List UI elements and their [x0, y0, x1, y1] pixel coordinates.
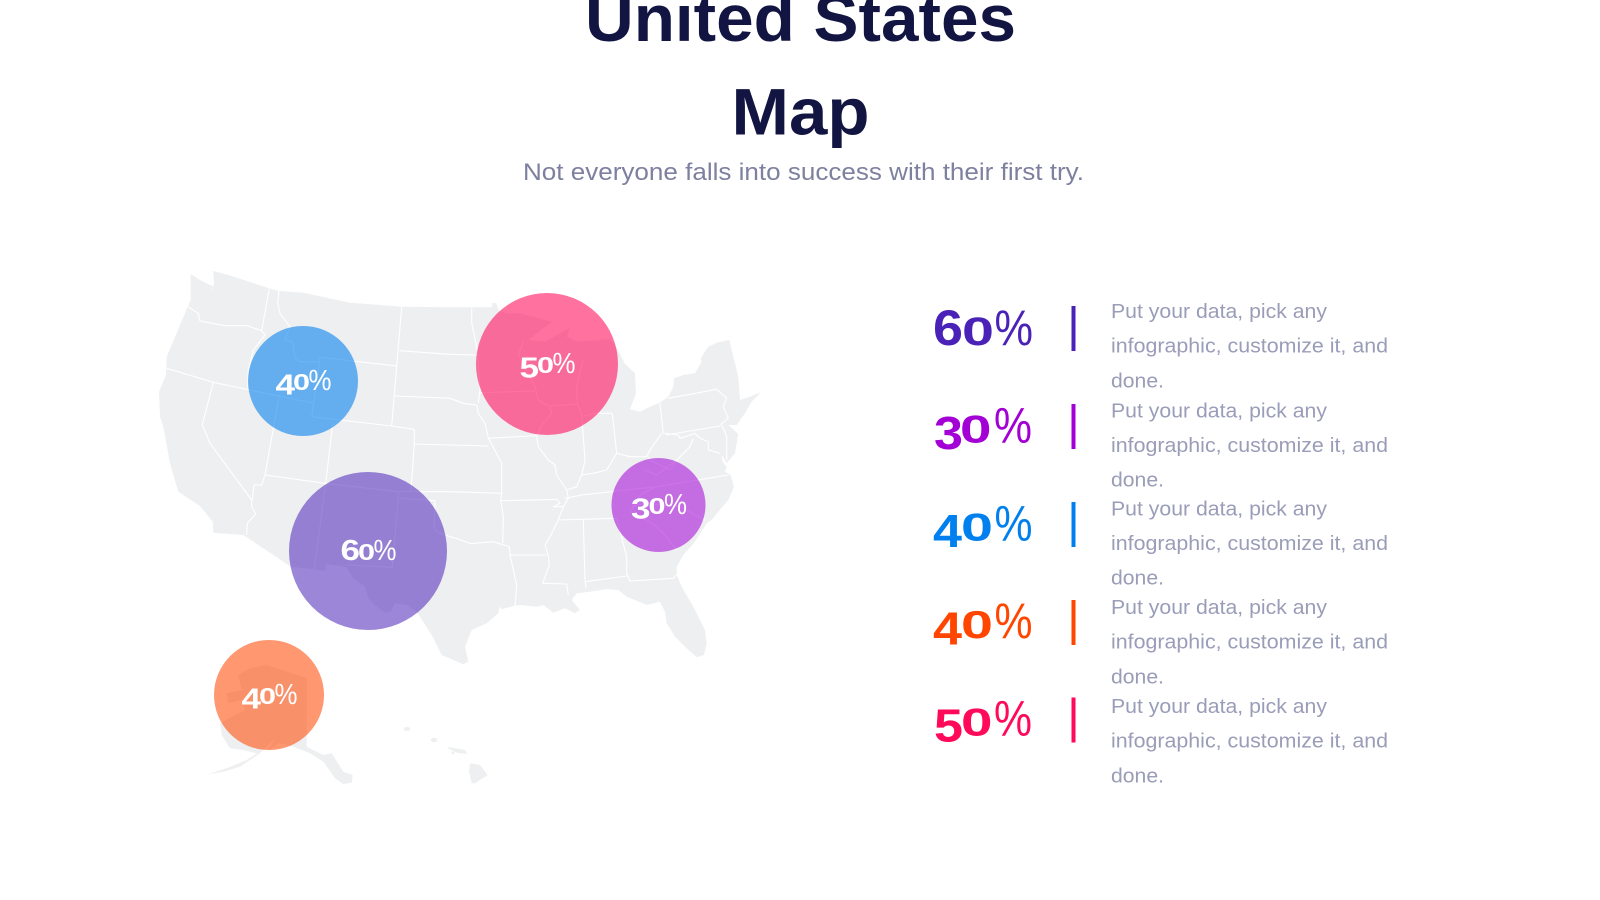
bubble: 60% south-west: 0: [358, 539, 375, 565]
description: infographic, customize it, and: [1111, 335, 1388, 358]
bubble: 30% south-east: [612, 458, 706, 552]
bubble: 40% Alaska: 4: [242, 683, 261, 715]
bubble: 40% Alaska: [214, 640, 324, 750]
legend row: 30%: [934, 398, 1388, 492]
value: 3: [934, 407, 963, 459]
bubble: 40% north-west: 0: [293, 369, 310, 395]
title: Map: [732, 74, 870, 148]
description: infographic, customize it, and: [1111, 434, 1388, 457]
Hawaii: [404, 727, 488, 783]
bubble: 40% north-west: 4: [276, 369, 295, 401]
legend row: 40% orange: [933, 593, 1388, 688]
description: done.: [1111, 567, 1164, 590]
Alaska: [208, 665, 353, 784]
description: [1111, 695, 1388, 787]
bubble: 50% upper midwest: [476, 293, 618, 435]
bubble: 30% south-east: %: [664, 489, 687, 521]
bubble: 40% Alaska: 0: [259, 683, 276, 709]
title: [585, 0, 1016, 148]
value: 4: [933, 505, 962, 557]
legend row: 60%: [933, 300, 1388, 392]
divider bar: [1072, 404, 1076, 449]
value: 0: [962, 310, 994, 354]
legend row: 50%: [934, 690, 1388, 787]
description: Put your data, pick any: [1111, 695, 1328, 718]
bubble: 50% upper midwest: 5: [520, 352, 539, 384]
bubble: 40% north-west: [248, 326, 358, 436]
value: 0: [961, 604, 993, 647]
description: Put your data, pick any: [1111, 596, 1328, 619]
legend row: 40% blue: [933, 496, 1388, 590]
value: 0: [960, 408, 992, 452]
description: Put your data, pick any: [1111, 300, 1328, 323]
bubble: 50% upper midwest: 0: [537, 352, 554, 378]
bubble: 60% south-west: [289, 472, 447, 630]
value: %: [994, 300, 1033, 356]
bubble: 40% Alaska: %: [274, 679, 298, 711]
value: %: [994, 690, 1032, 746]
bubble: 60% south-west: %: [374, 535, 396, 567]
state borders: [167, 288, 728, 607]
description: Put your data, pick any: [1111, 399, 1328, 422]
value: 4: [933, 602, 962, 654]
value: 0: [961, 506, 993, 550]
bubble: 50% upper midwest: %: [552, 348, 576, 380]
divider bar: [1072, 600, 1076, 645]
description: infographic, customize it, and: [1111, 532, 1388, 555]
mainland silhouette: [159, 271, 761, 664]
value: 6: [933, 300, 963, 356]
description: [1111, 497, 1388, 590]
description: infographic, customize it, and: [1111, 631, 1388, 654]
subtitle: Not everyone falls into success with their first try.: [523, 159, 1084, 186]
description: done.: [1111, 369, 1164, 392]
value: %: [994, 398, 1032, 454]
description: done.: [1111, 469, 1164, 492]
divider bar: [1072, 698, 1076, 742]
description: done.: [1111, 665, 1164, 688]
bubble: 40% north-west: %: [308, 365, 332, 397]
value: 5: [934, 700, 963, 752]
divider bar: [1072, 306, 1076, 351]
description: [1111, 596, 1388, 688]
divider bar: [1072, 502, 1076, 547]
value: %: [994, 496, 1032, 552]
bubble: 30% south-east: 0: [648, 493, 666, 519]
description: done.: [1111, 764, 1164, 787]
value: 0: [961, 702, 992, 744]
bubble: 60% south-west: 6: [340, 535, 360, 567]
value: %: [994, 593, 1032, 649]
description: [1111, 300, 1388, 392]
bubble: 30% south-east: 3: [631, 493, 650, 525]
description: [1111, 399, 1388, 492]
description: Put your data, pick any: [1111, 497, 1328, 520]
map of the United States: [159, 271, 761, 784]
description: infographic, customize it, and: [1111, 730, 1388, 753]
